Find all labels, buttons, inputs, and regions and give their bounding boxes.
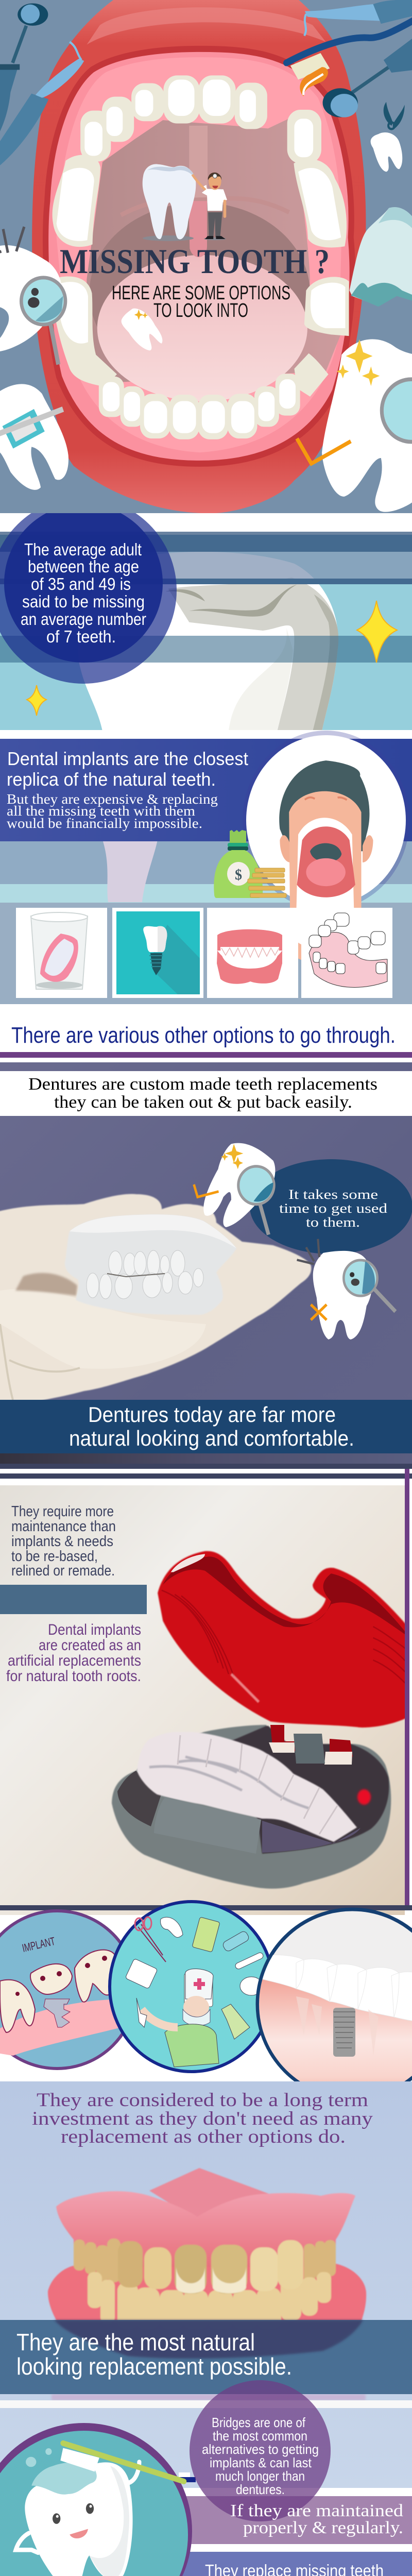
text: takes time to get used: It takes some	[288, 1187, 378, 1202]
lower teeth	[88, 2272, 331, 2329]
photo: gloved hand	[0, 1194, 311, 1404]
bottom dark strip	[0, 1453, 412, 1464]
text: artificial replacements: Dental implants	[48, 1621, 141, 1638]
text: long term investment: They are considered to be a long term	[37, 2090, 368, 2111]
photo background	[0, 2081, 412, 2496]
text: maintained regularly: If they are maintained	[230, 2501, 403, 2520]
icon: left probe	[0, 42, 84, 167]
text: average adult: of 35 and 49 is	[31, 574, 131, 594]
upper teeth	[53, 75, 347, 247]
text: dentures today: natural looking and comfortable.	[69, 1426, 354, 1450]
icon: money bag and coins	[214, 830, 286, 898]
subtitle: TO LOOK INTO	[153, 300, 248, 321]
text: implants heading: Dental implants are the closest	[7, 748, 248, 769]
implants band	[0, 739, 412, 841]
text: more maintenance: maintenance than	[11, 1518, 116, 1535]
text: takes time to get used	[279, 1187, 387, 1230]
text: most natural: looking replacement possible.	[16, 2353, 292, 2380]
icon: small sparkle	[27, 685, 46, 716]
text: artificial replacements: for natural tooth roots.	[6, 1668, 141, 1685]
text: takes time to get used: time to get used	[279, 1201, 387, 1216]
title: MISSING TOOTH ?	[60, 242, 330, 281]
circle: tooth brushing cartoon	[0, 2423, 192, 2576]
icon: teal tooth	[350, 207, 412, 307]
icon: bottom-right tooth with stars	[297, 339, 412, 512]
retainer tray, aligner and clip	[112, 1725, 391, 1889]
lower dark bar	[0, 1905, 412, 1910]
icon: small sparkling tooth	[122, 309, 162, 350]
text: implants heading: replica of the natural teeth.	[7, 769, 216, 790]
text: artificial replacements: are created as an	[39, 1637, 141, 1654]
palate	[149, 2168, 269, 2221]
section: mouth hero	[0, 0, 412, 513]
denture shadow through band	[54, 2320, 363, 2359]
text: long term investment: replacement as other options do.	[61, 2126, 346, 2147]
text: implants detail: all the missing teeth with them	[7, 803, 195, 819]
lower gum	[48, 2263, 366, 2357]
icon: large sparkle	[357, 601, 397, 663]
icon: main tooth	[143, 164, 196, 241]
small accent blocks	[179, 2472, 196, 2482]
gums	[46, 49, 352, 464]
text: implants detail: would be financially impossible.	[7, 816, 202, 831]
background bands	[0, 739, 412, 1004]
text: dentures definition	[28, 1075, 377, 1112]
text: bridges: the most common	[213, 2428, 307, 2444]
section: three circles	[0, 1902, 412, 2102]
text: bridges: dentures.	[236, 2482, 285, 2497]
circle: cartoon nurse	[110, 1902, 273, 2072]
ghost tooth root	[102, 840, 158, 902]
text: most natural	[16, 2329, 292, 2380]
red lid	[158, 1551, 412, 1727]
icon: pliers with tooth	[371, 102, 405, 172]
thumbnail: implant icon	[112, 908, 203, 998]
thumbnail: denture set	[207, 908, 298, 998]
photo: retainer case	[0, 1485, 412, 1915]
text: bridges: much longer than	[215, 2468, 305, 2484]
section: average adult statistic	[0, 497, 412, 731]
section: dental implants	[0, 731, 412, 1004]
lower teeth	[51, 276, 349, 439]
text: implants heading	[7, 748, 248, 790]
text: maintained regularly: properly & regularly.	[243, 2518, 403, 2537]
section: dentures photo	[0, 1062, 412, 1464]
divider bar	[0, 1052, 412, 1058]
horizontal overlay bands	[0, 532, 412, 663]
text: dentures today: Dentures today are far more	[88, 1402, 336, 1427]
text: dentures today	[69, 1402, 354, 1450]
text: average adult	[21, 540, 146, 646]
text: long term investment	[32, 2090, 373, 2147]
icon: right mirror	[323, 36, 412, 117]
text: more maintenance: implants & needs	[11, 1533, 113, 1550]
background bands	[0, 2488, 412, 2576]
lips	[32, 0, 366, 513]
callout text bubble	[250, 1159, 412, 1254]
dentures today band	[0, 1400, 412, 1453]
icon: money bag and coins: $	[235, 867, 242, 883]
blue divider panel	[0, 1585, 147, 1614]
thumbnail: partial denture line drawing	[301, 908, 392, 998]
icon: top-left mirror	[0, 4, 48, 137]
section: bridges	[0, 2380, 412, 2576]
text: takes time to get used: to them.	[306, 1215, 360, 1230]
thumbnail: denture in glass	[16, 908, 107, 998]
text: bridges: implants & can last	[210, 2455, 312, 2470]
icon: toothbrush with paste	[286, 20, 412, 96]
pale strip	[0, 2400, 412, 2408]
text: artificial replacements: artificial replacements	[8, 1652, 141, 1669]
text: most natural: They are the most natural	[16, 2329, 255, 2355]
subtitle	[113, 285, 290, 317]
text: implants detail: But they are expensive & replacing	[7, 791, 218, 807]
section background with big tooth	[0, 552, 412, 730]
band: natural looking	[0, 2320, 412, 2394]
photo: full denture	[48, 2168, 366, 2357]
icon: top-right probe	[304, 0, 412, 36]
subtitle: HERE ARE SOME OPTIONS	[112, 282, 290, 304]
circle: statistic backdrop	[0, 497, 177, 684]
text: average adult: The average adult	[24, 540, 142, 559]
text: more maintenance: relined or remade.	[11, 1563, 115, 1579]
tongue	[97, 255, 307, 401]
icon: bottom-left tooth with brace	[0, 384, 68, 490]
text: artificial replacements	[6, 1621, 141, 1685]
icon: tooth with decay magnifier	[297, 1239, 396, 1340]
circle: implant in gum illustration	[258, 1909, 412, 2102]
upper gum	[56, 2191, 355, 2267]
side teeth	[74, 2239, 336, 2285]
circle: bridges	[190, 2380, 331, 2521]
icon: tooth with magnifier	[194, 1143, 275, 1235]
circle: cartoon implant: IMPLANT	[21, 1935, 56, 1955]
dentures caption strip	[0, 1071, 412, 1116]
section: retainer photo	[0, 1464, 412, 1915]
icon: dentist	[192, 173, 227, 240]
circle: cartoon implant	[0, 1911, 136, 2069]
throat	[87, 117, 341, 383]
text: average adult: between the age	[28, 557, 139, 576]
text: bridges: Bridges are one of	[212, 2415, 306, 2430]
photo: plaster dental cast	[65, 1214, 236, 1315]
text: dentures definition: Dentures are custom made teeth replacements	[28, 1075, 377, 1094]
text: bridges	[202, 2415, 319, 2497]
text: long term investment: investment as they don't need as many	[32, 2108, 373, 2129]
text: average adult: said to be missing	[22, 592, 145, 611]
icon: open mouth patient	[243, 731, 409, 964]
text: dentures definition: they can be taken out & put back easily.	[54, 1093, 352, 1112]
text: bridges: alternatives to getting	[202, 2442, 319, 2457]
section: natural looking dentures	[0, 2081, 412, 2496]
frame bars	[0, 1464, 412, 1905]
front teeth	[118, 2240, 303, 2294]
photo background	[0, 1062, 412, 1464]
icon: left white tooth with magnifier	[0, 227, 65, 364]
text: more maintenance: They require more	[11, 1503, 114, 1520]
text: more maintenance: to be re-based,	[11, 1548, 98, 1565]
text: maintained regularly	[230, 2501, 403, 2537]
reflection below denture	[52, 2394, 366, 2400]
text: implants detail	[7, 791, 218, 831]
text: more maintenance	[11, 1503, 116, 1579]
text: average adult: of 7 teeth.	[46, 627, 116, 646]
text: average adult: an average number	[21, 609, 146, 629]
